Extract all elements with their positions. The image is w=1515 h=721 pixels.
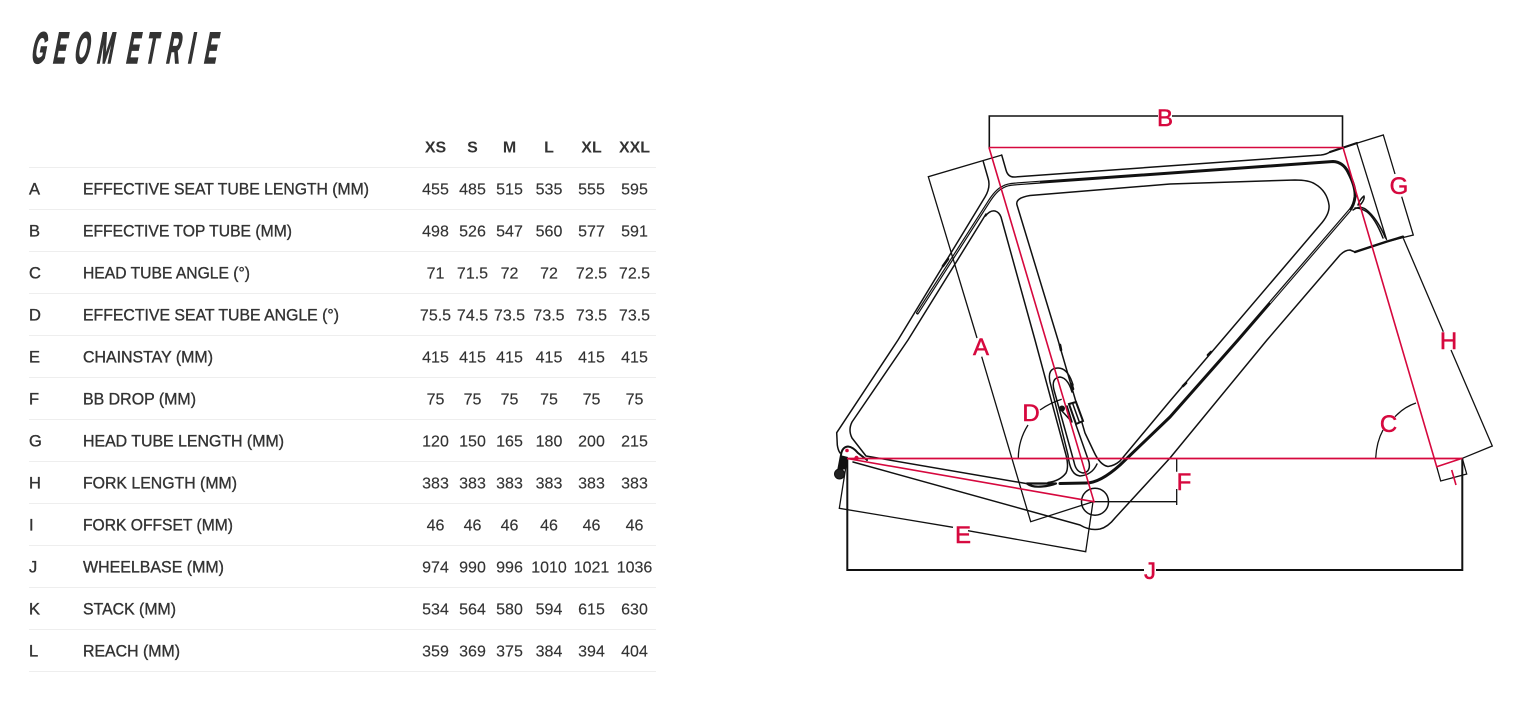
cable clips bbox=[943, 259, 1211, 389]
row J: WHEELBASE (MM) bbox=[83, 558, 224, 576]
row K: STACK (MM) bbox=[83, 600, 176, 618]
row E: 415 bbox=[578, 350, 605, 366]
row H: 383 bbox=[459, 476, 486, 492]
row E: 415 bbox=[621, 350, 648, 366]
dimension letters: G bbox=[1390, 173, 1408, 200]
seat stay outer edge bbox=[837, 162, 989, 453]
row L bbox=[29, 642, 648, 660]
row K: 615 bbox=[578, 602, 605, 618]
row C: HEAD TUBE ANGLE (°) bbox=[83, 264, 250, 282]
row H: 383 bbox=[536, 476, 562, 492]
row A: EFFECTIVE SEAT TUBE LENGTH (MM) bbox=[83, 180, 369, 198]
row G: 200 bbox=[578, 434, 605, 450]
table header row: L bbox=[544, 140, 554, 156]
dimension H bracket bbox=[1403, 238, 1492, 458]
row L: 369 bbox=[459, 644, 486, 660]
dimension D arc bbox=[1018, 399, 1062, 458]
top tube and main double line bbox=[918, 162, 1355, 484]
dimension J bracket bbox=[847, 458, 1462, 570]
row B: 526 bbox=[459, 224, 486, 240]
row A: 485 bbox=[459, 182, 486, 198]
red reference lines bbox=[845, 148, 1462, 502]
row F: 75 bbox=[501, 392, 518, 408]
row J: 974 bbox=[422, 560, 449, 576]
row I: 46 bbox=[464, 518, 482, 534]
row A: 515 bbox=[496, 182, 523, 198]
row E: CHAINSTAY (MM) bbox=[83, 348, 213, 366]
row B: B bbox=[29, 222, 40, 240]
dimension letters: D bbox=[1022, 400, 1040, 427]
row B: 577 bbox=[578, 224, 605, 240]
row H: 383 bbox=[621, 476, 648, 492]
row B bbox=[29, 222, 648, 240]
row L: 394 bbox=[578, 644, 605, 660]
row J: 990 bbox=[459, 560, 486, 576]
table header row: XXL bbox=[619, 140, 650, 156]
chainstay brace bbox=[1027, 484, 1056, 487]
table header row bbox=[425, 140, 650, 156]
row D: 73.5 bbox=[576, 308, 607, 324]
row H: FORK LENGTH (MM) bbox=[83, 474, 237, 492]
seat stay inner and chain stay top bbox=[850, 214, 1026, 484]
frame outline bbox=[834, 143, 1403, 530]
down tube upper and seat tube right edge bbox=[1017, 180, 1329, 466]
row K: 534 bbox=[422, 602, 449, 618]
row C: 71.5 bbox=[457, 266, 488, 282]
dimension letters: C bbox=[1380, 411, 1397, 438]
row L: 375 bbox=[496, 644, 523, 660]
row C: 72 bbox=[540, 266, 558, 282]
row C: 71 bbox=[427, 266, 444, 282]
row L: 359 bbox=[422, 644, 449, 660]
row C bbox=[29, 264, 650, 282]
row F bbox=[29, 390, 644, 408]
row D: EFFECTIVE SEAT TUBE ANGLE (°) bbox=[83, 306, 339, 324]
row F: 75 bbox=[583, 392, 600, 408]
row K: 630 bbox=[621, 602, 648, 618]
row J: J bbox=[29, 558, 37, 576]
row H: 383 bbox=[496, 476, 523, 492]
row B: 498 bbox=[422, 224, 449, 240]
row F: F bbox=[29, 390, 39, 408]
row J: 1021 bbox=[574, 560, 609, 576]
row G: 215 bbox=[621, 434, 648, 450]
dimension A bracket bbox=[928, 155, 1093, 522]
dimension G bracket bbox=[1357, 135, 1413, 242]
table header row: S bbox=[467, 140, 478, 156]
row F: 75 bbox=[464, 392, 482, 408]
dimension C arc bbox=[1376, 403, 1416, 458]
row D bbox=[29, 306, 650, 324]
row A: 555 bbox=[578, 182, 605, 198]
row D: 74.5 bbox=[457, 308, 488, 324]
row A: 535 bbox=[536, 182, 562, 198]
dimension letters: F bbox=[1177, 469, 1191, 496]
dimension letters: A bbox=[973, 334, 989, 361]
row K bbox=[29, 600, 648, 618]
rear dropout bbox=[834, 446, 867, 479]
dimension letters: E bbox=[955, 522, 971, 549]
row C: C bbox=[29, 264, 41, 282]
dimension F bracket bbox=[1093, 459, 1177, 505]
row F: 75 bbox=[427, 392, 444, 408]
row L: 384 bbox=[536, 644, 562, 660]
row K: 580 bbox=[496, 602, 523, 618]
row E: 415 bbox=[496, 350, 523, 366]
row J bbox=[29, 558, 652, 576]
row D: D bbox=[29, 306, 41, 324]
dimension B bracket bbox=[989, 116, 1342, 148]
dimension letters: B bbox=[1157, 105, 1173, 132]
row K: 594 bbox=[536, 602, 562, 618]
head tube details bbox=[1355, 208, 1383, 238]
row B: 560 bbox=[536, 224, 562, 240]
row E: 415 bbox=[422, 350, 449, 366]
row G: 180 bbox=[536, 434, 562, 450]
top tube upper edge bbox=[1002, 152, 1330, 177]
seat tube left edge bbox=[986, 211, 1068, 482]
dimension letters: J bbox=[1144, 558, 1156, 585]
row L: L bbox=[29, 642, 38, 660]
row F: 75 bbox=[626, 392, 644, 408]
table header row: XS bbox=[425, 140, 446, 156]
row L: REACH (MM) bbox=[83, 642, 180, 660]
row B: 547 bbox=[496, 224, 523, 240]
row I: FORK OFFSET (MM) bbox=[83, 516, 233, 534]
table header row: XL bbox=[581, 140, 602, 156]
row I: I bbox=[29, 516, 34, 534]
row D: 75.5 bbox=[420, 308, 451, 324]
row I: 46 bbox=[540, 518, 558, 534]
row H bbox=[29, 474, 648, 492]
row D: 73.5 bbox=[494, 308, 525, 324]
dimension letters bbox=[955, 105, 1457, 585]
row I: 46 bbox=[583, 518, 600, 534]
row I bbox=[29, 516, 644, 534]
row G: 165 bbox=[496, 434, 523, 450]
row I: 46 bbox=[626, 518, 644, 534]
row I: 46 bbox=[427, 518, 444, 534]
row J: 996 bbox=[496, 560, 523, 576]
row A bbox=[29, 180, 648, 198]
row A: A bbox=[29, 180, 40, 198]
row B: 591 bbox=[621, 224, 648, 240]
row G: HEAD TUBE LENGTH (MM) bbox=[83, 432, 284, 450]
row K: 564 bbox=[459, 602, 486, 618]
table header row: M bbox=[503, 140, 516, 156]
row H: 383 bbox=[422, 476, 449, 492]
row G: 120 bbox=[422, 434, 449, 450]
row E: E bbox=[29, 348, 40, 366]
row G bbox=[29, 432, 648, 450]
row G: G bbox=[29, 432, 42, 450]
row I: 46 bbox=[501, 518, 518, 534]
dimension E bracket bbox=[839, 462, 1093, 552]
row C: 72 bbox=[501, 266, 518, 282]
row K: K bbox=[29, 600, 40, 618]
dimension I bracket bbox=[1437, 458, 1467, 481]
row C: 72.5 bbox=[576, 266, 607, 282]
row E: 415 bbox=[459, 350, 486, 366]
row J: 1010 bbox=[531, 560, 567, 576]
row F: 75 bbox=[540, 392, 558, 408]
row J: 1036 bbox=[617, 560, 652, 576]
bottom bracket circle bbox=[1082, 488, 1108, 515]
row D: 73.5 bbox=[619, 308, 650, 324]
row H: 383 bbox=[578, 476, 605, 492]
row F: BB DROP (MM) bbox=[83, 390, 196, 408]
bike frame diagram bbox=[834, 105, 1492, 585]
row E: 415 bbox=[536, 350, 562, 366]
seat tube ovals bbox=[1049, 368, 1097, 476]
bottle bracket clamp bbox=[1059, 402, 1083, 424]
row B: EFFECTIVE TOP TUBE (MM) bbox=[83, 222, 292, 240]
row A: 455 bbox=[422, 182, 449, 198]
row E bbox=[29, 348, 648, 366]
row G: 150 bbox=[459, 434, 486, 450]
down tube lower edge bbox=[853, 250, 1355, 530]
title: GEOMETRIE bbox=[28, 25, 223, 73]
row H: H bbox=[29, 474, 41, 492]
row D: 73.5 bbox=[533, 308, 565, 324]
row A: 595 bbox=[621, 182, 648, 198]
row C: 72.5 bbox=[619, 266, 650, 282]
geometry table bbox=[29, 140, 656, 672]
row L: 404 bbox=[621, 644, 648, 660]
dimension letters: H bbox=[1440, 328, 1457, 355]
